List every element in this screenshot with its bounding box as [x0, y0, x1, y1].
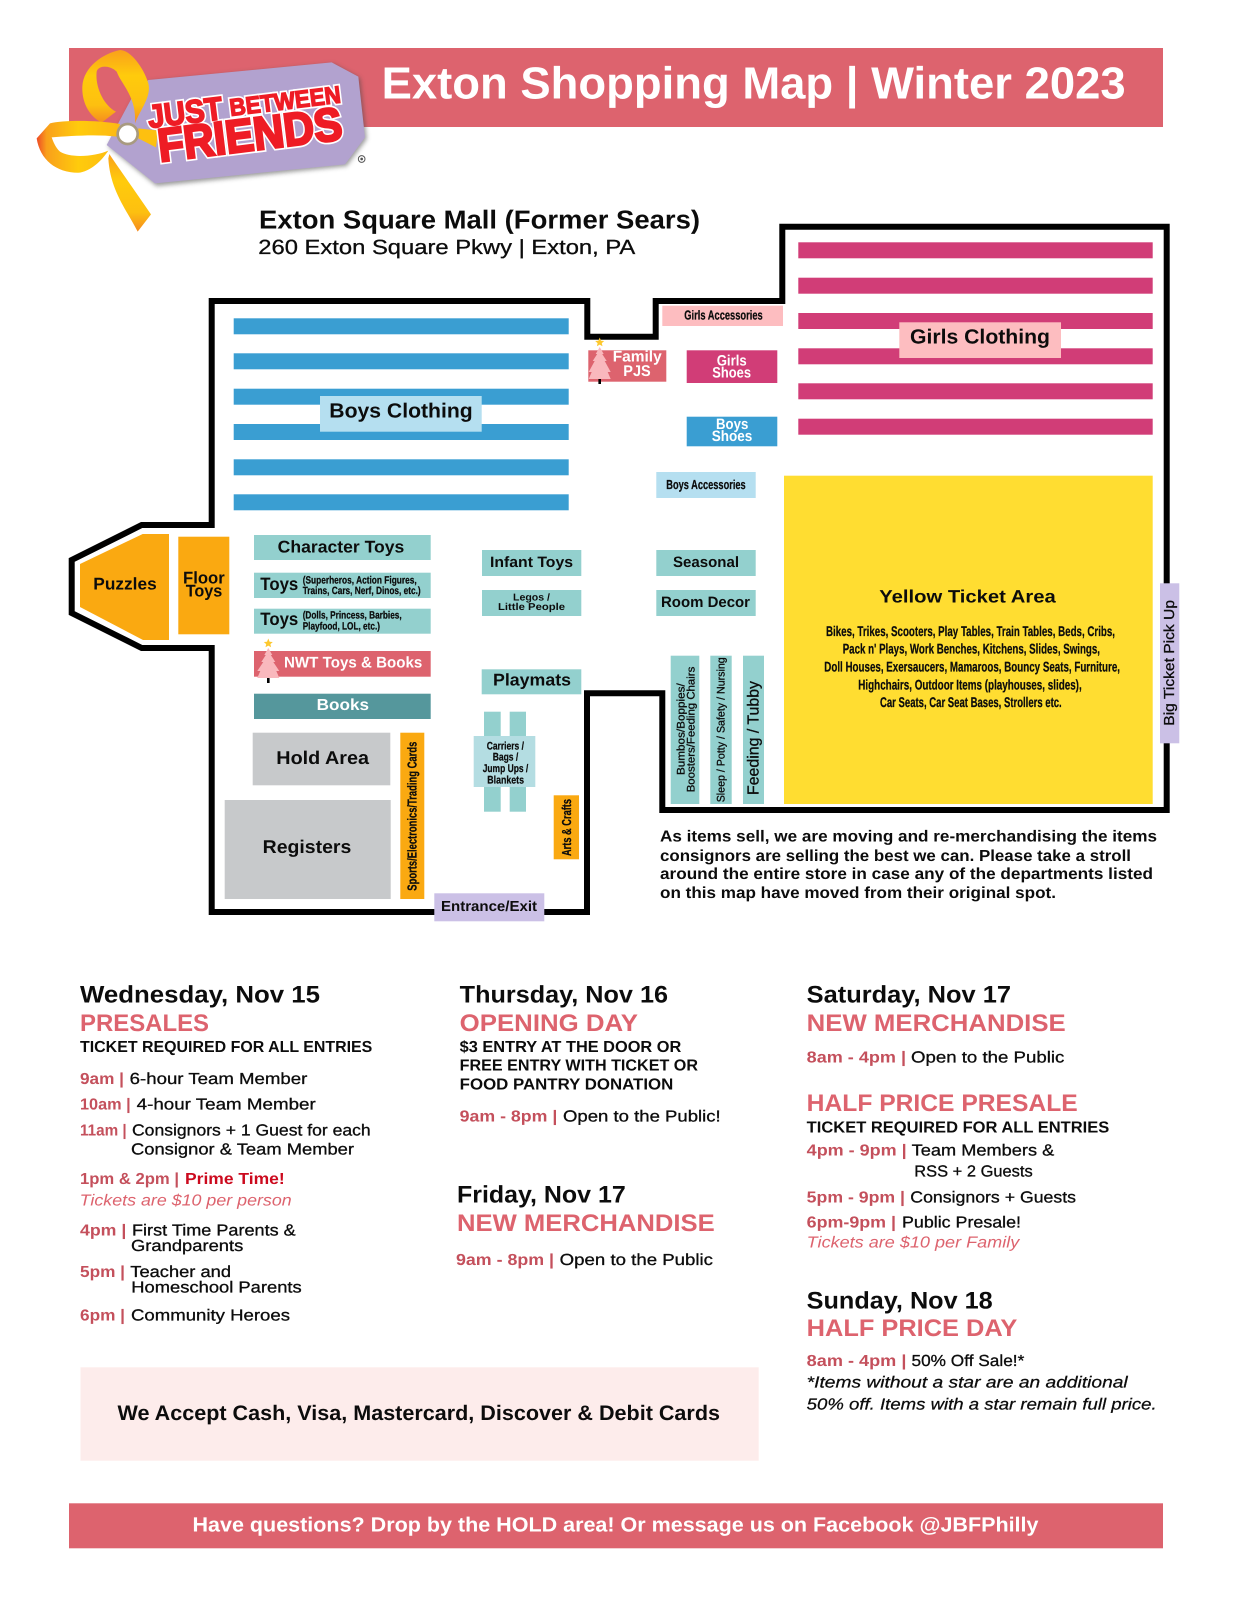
- schedule: wednesday: 9am |: [80, 1071, 124, 1088]
- logo: Just Between Friends tag with ribbon: FRIENDS: [155, 98, 345, 172]
- girls clothing shelves: [798, 242, 1153, 435]
- boys shoes: [687, 416, 777, 446]
- schedule: wednesday: Wednesday, Nov 15: [80, 982, 320, 1009]
- seasonal: [656, 550, 756, 576]
- schedule: wednesday: 10am |: [80, 1097, 131, 1114]
- arts and crafts: [554, 795, 579, 859]
- entrance: [434, 893, 544, 921]
- yellow ticket area: Yellow Ticket Area: [879, 586, 1057, 606]
- infant toys: [482, 550, 581, 576]
- schedule: friday: NEW MERCHANDISE: [457, 1210, 715, 1237]
- schedule: wednesday: 4-hour Team Member: [137, 1097, 316, 1114]
- logo: Just Between Friends tag with ribbon: JUST: [146, 90, 224, 135]
- schedule: wednesday: Teacher and: [130, 1264, 231, 1281]
- schedule: saturday: Tickets are $10 per Family: [807, 1235, 1020, 1252]
- schedule: friday: Friday, Nov 17: [457, 1181, 626, 1208]
- schedule: wednesday: Homeschool Parents: [131, 1280, 302, 1297]
- carriers shelf: Blankets: [487, 774, 524, 786]
- schedule: saturday: Public Presale!: [902, 1215, 1021, 1232]
- feeding shelf: [743, 656, 764, 804]
- yellow ticket area: Highchairs, Outdoor Items (playhouses, slides),: [858, 677, 1082, 693]
- schedule: saturday: Open to the Public: [911, 1049, 1064, 1066]
- boys shoes: Boys: [716, 416, 748, 433]
- schedule: wednesday: 4pm |: [80, 1222, 126, 1239]
- registers: [225, 800, 391, 899]
- payment callout: We Accept Cash, Visa, Mastercard, Discover & Debit Cards: [118, 1402, 720, 1425]
- girls shoes: [687, 350, 777, 383]
- schedule: saturday: 8am - 4pm |: [807, 1049, 906, 1066]
- schedule: wednesday: Prime Time!: [185, 1171, 285, 1188]
- entrance: Entrance/Exit: [441, 899, 537, 915]
- payment callout: [80, 1367, 759, 1461]
- building walls: [72, 227, 1167, 912]
- girls shoes: Girls: [717, 353, 747, 370]
- schedule: thursday: FOOD PANTRY DONATION: [460, 1076, 673, 1093]
- infant toys: Infant Toys: [490, 554, 573, 571]
- toys: dolls: Playfood, LOL, etc.): [303, 620, 380, 632]
- girls shoes: Shoes: [712, 365, 751, 382]
- schedule: wednesday: TICKET REQUIRED FOR ALL ENTRIES: [80, 1039, 373, 1056]
- yellow ticket area: Car Seats, Car Seat Bases, Strollers etc.: [880, 694, 1062, 710]
- schedule: sunday: 50% Off Sale!*: [912, 1353, 1024, 1370]
- toys: superheros: (Superheros, Action Figures,: [303, 574, 417, 586]
- schedule: sunday: [807, 1287, 1157, 1413]
- schedule: wednesday: Tickets are $10 per person: [80, 1192, 292, 1209]
- toys: superheros: Trains, Cars, Nerf, Dinos, etc.): [303, 585, 421, 597]
- logo: Just Between Friends tag with ribbon: BETWEEN: [228, 81, 342, 121]
- schedule: thursday: FREE ENTRY WITH TICKET OR: [460, 1057, 698, 1074]
- carriers shelf: Jump Ups /: [483, 763, 528, 775]
- feeding shelf: Feeding / Tubby: [745, 681, 762, 795]
- schedule: saturday: Consignors + Guests: [910, 1189, 1076, 1206]
- schedule: friday: [456, 1181, 715, 1269]
- hold area: Hold Area: [276, 747, 370, 768]
- family pjs: PJS: [623, 363, 651, 380]
- schedule: saturday: Team Members &: [912, 1142, 1055, 1159]
- schedule: wednesday: [80, 982, 373, 1325]
- toys: dolls: Toys: [260, 609, 298, 629]
- icon: christmas tree: [257, 638, 279, 683]
- footer banner: [69, 1503, 1163, 1548]
- schedule: saturday: 6pm-9pm |: [807, 1215, 896, 1232]
- boys accessories: Boys Accessories: [666, 477, 746, 492]
- logo: Just Between Friends tag with ribbon: FRIENDS: [155, 98, 345, 172]
- hold area: [253, 733, 390, 785]
- schedule: saturday: HALF PRICE PRESALE: [807, 1090, 1078, 1117]
- family pjs: [588, 338, 666, 384]
- schedule: friday: Open to the Public: [560, 1252, 713, 1269]
- seasonal: Seasonal: [673, 554, 739, 571]
- merchandising note: on this map have moved from their original spot.: [660, 885, 1056, 902]
- header banner: [69, 48, 1163, 127]
- registers: Registers: [263, 836, 351, 857]
- yellow ticket area: Bikes, Trikes, Scooters, Play Tables, Train Tables, Beds, Cribs,: [826, 623, 1115, 639]
- merchandising note: around the entire store in case any of the departments listed: [660, 866, 1153, 883]
- footer banner: Have questions? Drop by the HOLD area! Or message us on Facebook @JBFPhilly: [192, 1514, 1039, 1537]
- schedule: saturday: TICKET REQUIRED FOR ALL ENTRIES: [807, 1120, 1110, 1137]
- boys clothing label: Boys Clothing: [329, 400, 473, 423]
- big ticket pick up: [1160, 583, 1179, 743]
- schedule: thursday: OPENING DAY: [460, 1010, 638, 1037]
- family pjs: Family: [613, 349, 662, 366]
- schedule: sunday: 8am - 4pm |: [807, 1353, 906, 1370]
- puzzles: [80, 534, 169, 640]
- schedule: thursday: [460, 982, 721, 1126]
- store map: [72, 227, 1179, 921]
- legos: [482, 590, 581, 616]
- boys accessories: [656, 472, 756, 498]
- bumbos shelf: [671, 656, 699, 804]
- schedule: thursday: Open to the Public!: [563, 1109, 721, 1126]
- toys: superheros: Toys: [260, 574, 298, 594]
- boys clothing shelves: [234, 318, 569, 510]
- schedule: friday: 9am - 8pm |: [456, 1252, 554, 1269]
- room decor: [656, 590, 756, 616]
- location heading: [258, 204, 700, 259]
- boys shoes: Shoes: [712, 428, 752, 445]
- yellow ticket area: Doll Houses, Exersaucers, Mamaroos, Bouncy Seats, Furniture,: [824, 659, 1120, 675]
- playmats: Playmats: [493, 670, 571, 689]
- schedule: wednesday: 5pm |: [80, 1264, 125, 1281]
- schedule: saturday: RSS + 2 Guests: [914, 1164, 1033, 1181]
- schedule: saturday: [807, 982, 1110, 1252]
- toys: dolls: [254, 609, 431, 634]
- floor toys: [178, 537, 229, 634]
- schedule: sunday: 50% off. Items with a star remain full price.: [807, 1396, 1157, 1413]
- carriers shelf: Bags /: [493, 752, 518, 764]
- toys: superheros: [254, 573, 431, 598]
- character toys: Character Toys: [278, 538, 404, 557]
- schedule: wednesday: Consignors + 1 Guest for each: [132, 1122, 371, 1139]
- floor toys: Toys: [186, 582, 222, 601]
- girls accessories: [662, 306, 783, 326]
- schedule: wednesday: PRESALES: [80, 1010, 209, 1037]
- sleep shelf: [710, 656, 732, 804]
- schedule: wednesday: Grandparents: [131, 1238, 243, 1255]
- toys: dolls: (Dolls, Princess, Barbies,: [303, 609, 402, 621]
- schedule: saturday: Saturday, Nov 17: [807, 982, 1011, 1009]
- carriers shelf: [474, 712, 535, 812]
- logo: Just Between Friends tag with ribbon: [37, 50, 367, 232]
- floor toys: Floor: [183, 568, 225, 587]
- location heading: Exton Square Mall (Former Sears): [259, 204, 700, 234]
- schedule: sunday: HALF PRICE DAY: [807, 1315, 1017, 1342]
- sports shelf: Sports/Electronics/Trading Cards: [404, 742, 420, 891]
- girls accessories: Girls Accessories: [684, 307, 763, 322]
- merchandising note: [660, 829, 1157, 902]
- location heading: 260 Exton Square Pkwy | Exton, PA: [258, 236, 636, 259]
- schedule: wednesday: 11am |: [80, 1122, 127, 1139]
- merchandising note: consignors are selling the best we can. Please take a stroll: [660, 848, 1131, 865]
- schedule: wednesday: Community Heroes: [131, 1308, 290, 1325]
- boys clothing label: [320, 396, 482, 432]
- title: Exton Shopping Map | Winter 2023: [382, 58, 1126, 108]
- girls clothing label: Girls Clothing: [910, 325, 1050, 348]
- girls clothing label: [899, 322, 1061, 358]
- bumbos shelf: Boosters/Feeding Chairs: [685, 666, 697, 792]
- schedule: saturday: NEW MERCHANDISE: [807, 1010, 1066, 1037]
- puzzles: Puzzles: [93, 574, 157, 593]
- books: [254, 694, 431, 719]
- schedule: saturday: 5pm - 9pm |: [807, 1189, 905, 1206]
- arts and crafts: Arts & Crafts: [559, 799, 574, 856]
- legos: Little People: [498, 602, 565, 613]
- schedule: wednesday: Consignor & Team Member: [131, 1141, 355, 1158]
- schedule: sunday: *Items without a star are an additional: [807, 1375, 1128, 1392]
- bumbos shelf: Bumbos/Boppies/: [675, 682, 687, 775]
- schedule: wednesday: First Time Parents &: [132, 1222, 296, 1239]
- legos: Legos /: [513, 592, 550, 604]
- schedule: thursday: Thursday, Nov 16: [460, 982, 668, 1009]
- room decor: Room Decor: [661, 594, 750, 611]
- schedule: saturday: 4pm - 9pm |: [807, 1142, 907, 1159]
- merchandising note: As items sell, we are moving and re-merchandising the items: [660, 829, 1157, 846]
- yellow ticket area: [784, 476, 1153, 804]
- playmats: [482, 669, 581, 694]
- icon: christmas tree: [589, 338, 611, 384]
- logo: Just Between Friends tag with ribbon: JUST: [146, 90, 224, 135]
- schedule: thursday: $3 ENTRY AT THE DOOR OR: [460, 1039, 682, 1056]
- character toys: [254, 535, 431, 560]
- carriers shelf: Carriers /: [487, 740, 524, 752]
- schedule: sunday: Sunday, Nov 18: [807, 1287, 993, 1314]
- schedule: thursday: 9am - 8pm |: [460, 1109, 557, 1126]
- big ticket pick up: Big Ticket Pick Up: [1162, 600, 1178, 726]
- sleep shelf: Sleep / Potty / Safety / Nursing: [715, 657, 727, 802]
- schedule: wednesday: 1pm & 2pm |: [80, 1171, 179, 1188]
- nwt toys and books: NWT Toys & Books: [284, 655, 422, 672]
- schedule: wednesday: 6-hour Team Member: [130, 1071, 308, 1088]
- yellow ticket area: Pack n' Plays, Work Benches, Kitchens, Slides, Swings,: [843, 641, 1100, 657]
- books: Books: [317, 697, 369, 714]
- nwt toys and books: [254, 638, 431, 683]
- logo: Just Between Friends tag with ribbon: BETWEEN: [228, 81, 342, 121]
- sports shelf: [400, 733, 424, 899]
- schedule: wednesday: 6pm |: [80, 1308, 125, 1325]
